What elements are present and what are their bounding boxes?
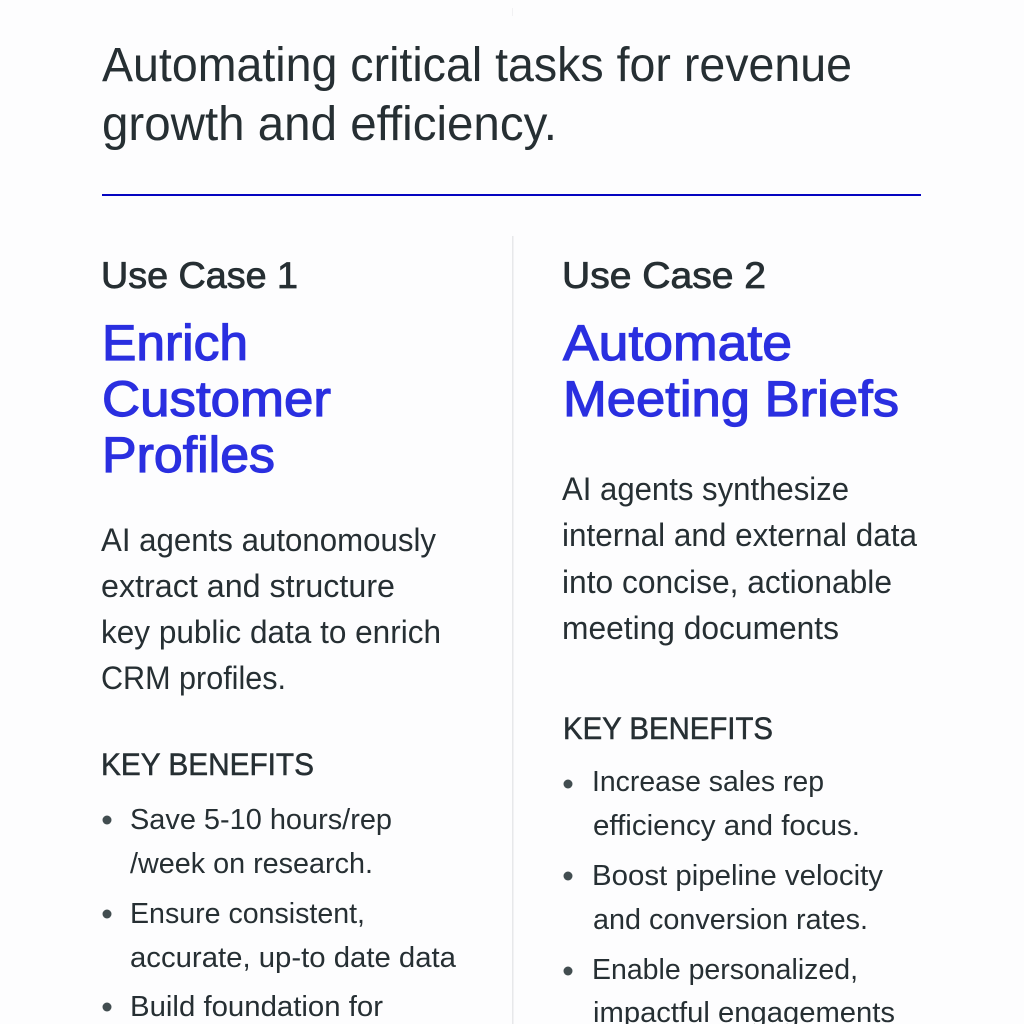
use case 1 heading: Enrich	[102, 315, 248, 371]
benefits list 1: accurate, up-to date data	[130, 942, 457, 974]
benefits list 1: Ensure consistent,	[130, 898, 365, 930]
benefits list 2: and conversion rates.	[593, 904, 868, 936]
benefits list 1: Save 5-10 hours/rep	[130, 804, 392, 836]
title: Automating critical tasks for revenue	[102, 39, 852, 92]
use case 1 description: key public data to enrich	[101, 614, 441, 650]
use case 2 description: meeting documents	[562, 610, 839, 646]
benefits list 2: Boost pipeline velocity	[592, 860, 883, 892]
use case 1 heading: Customer	[102, 371, 331, 427]
use case 1 description: CRM profiles.	[101, 660, 286, 696]
use case 2 label: Use Case 2	[562, 255, 766, 296]
use case 1 description	[101, 522, 441, 696]
use case 1 description: extract and structure	[101, 568, 395, 604]
use case 2 description: into concise, actionable	[562, 564, 892, 600]
use case 2 description	[562, 471, 917, 646]
use case 1 heading	[102, 315, 331, 483]
benefits list 2	[564, 766, 895, 1024]
key benefits heading 1: KEY BENEFITS	[101, 746, 314, 782]
benefits list 2: efficiency and focus.	[593, 810, 860, 842]
title rule	[102, 194, 921, 196]
benefits list 2: Enable personalized,	[592, 954, 858, 986]
title: growth and efficiency.	[102, 98, 557, 151]
use case 2 heading: Meeting Briefs	[563, 371, 899, 427]
use case 2 description: AI agents synthesize	[562, 471, 849, 507]
use case 2 description: internal and external data	[562, 517, 917, 553]
benefits list 2: Increase sales rep	[592, 766, 824, 798]
use case 2 heading: Automate	[563, 315, 792, 371]
use case 2 heading	[563, 315, 899, 427]
benefits list 1: Build foundation for	[130, 991, 383, 1023]
use case 1 description: AI agents autonomously	[101, 522, 436, 558]
use case 1 heading: Profiles	[102, 427, 275, 483]
column divider	[512, 236, 514, 1024]
panel: use case 2	[562, 255, 917, 1024]
benefits list 1	[102, 804, 457, 1023]
benefits list 1: /week on research.	[130, 848, 373, 880]
title	[102, 39, 852, 151]
use case 1 label: Use Case 1	[101, 255, 298, 296]
key benefits heading 2: KEY BENEFITS	[563, 710, 773, 746]
panel: use case 1	[101, 255, 457, 1023]
